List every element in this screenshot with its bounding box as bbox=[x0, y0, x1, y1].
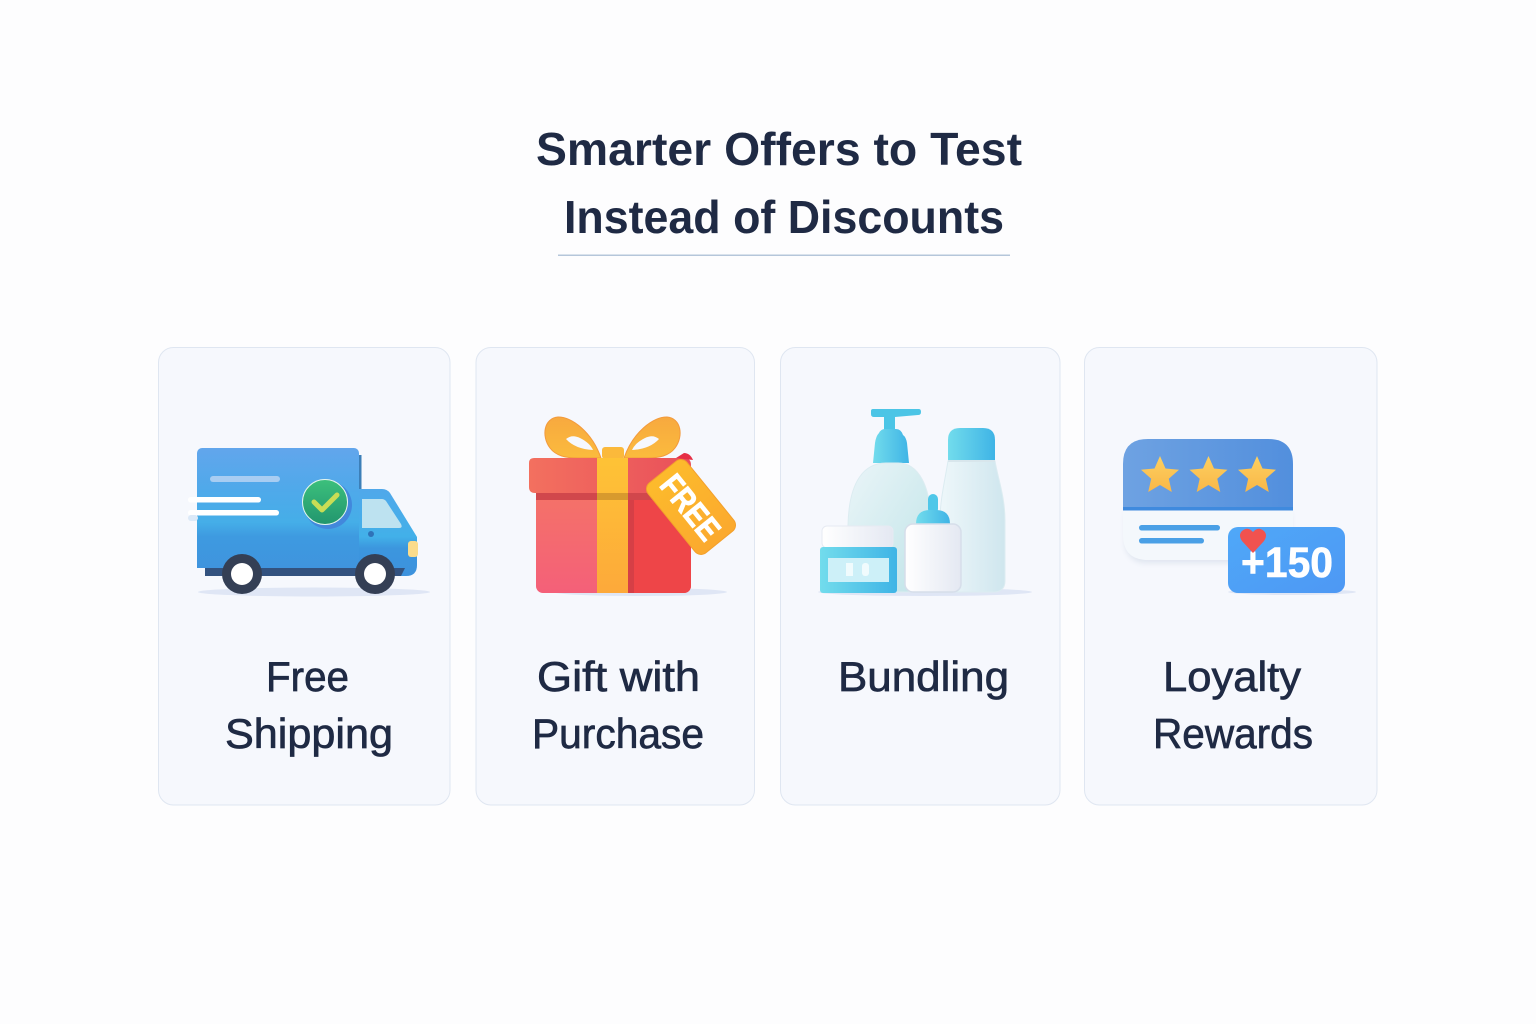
label: loyalty rewards bbox=[1153, 653, 1313, 757]
label: loyalty rewards: Loyalty bbox=[1163, 653, 1301, 700]
icon: rewards card: +150 bbox=[1241, 539, 1333, 587]
label: free shipping bbox=[225, 653, 393, 757]
icon: gift box: FREE bbox=[653, 467, 728, 548]
icon: rewards card bbox=[1123, 439, 1356, 595]
title bbox=[536, 123, 1022, 243]
title: Smarter Offers to Test bbox=[536, 123, 1022, 175]
icon: gift box bbox=[529, 417, 739, 596]
label: gift with purchase: Gift with bbox=[537, 653, 700, 700]
panel: bundling bbox=[780, 348, 1060, 805]
title: Instead of Discounts bbox=[564, 191, 1004, 243]
label: loyalty rewards: Rewards bbox=[1153, 710, 1313, 757]
label: bundling: Bundling bbox=[838, 653, 1009, 700]
panel: free shipping bbox=[158, 348, 450, 805]
label: free shipping: Shipping bbox=[225, 710, 393, 757]
panel: gift with purchase bbox=[476, 348, 754, 805]
label: free shipping: Free bbox=[266, 653, 349, 700]
icon: product bottles bbox=[818, 409, 1032, 596]
panel: loyalty rewards bbox=[1084, 348, 1377, 805]
label: gift with purchase: Purchase bbox=[532, 710, 704, 757]
label: gift with purchase bbox=[532, 653, 704, 757]
icon: delivery truck bbox=[188, 448, 430, 596]
